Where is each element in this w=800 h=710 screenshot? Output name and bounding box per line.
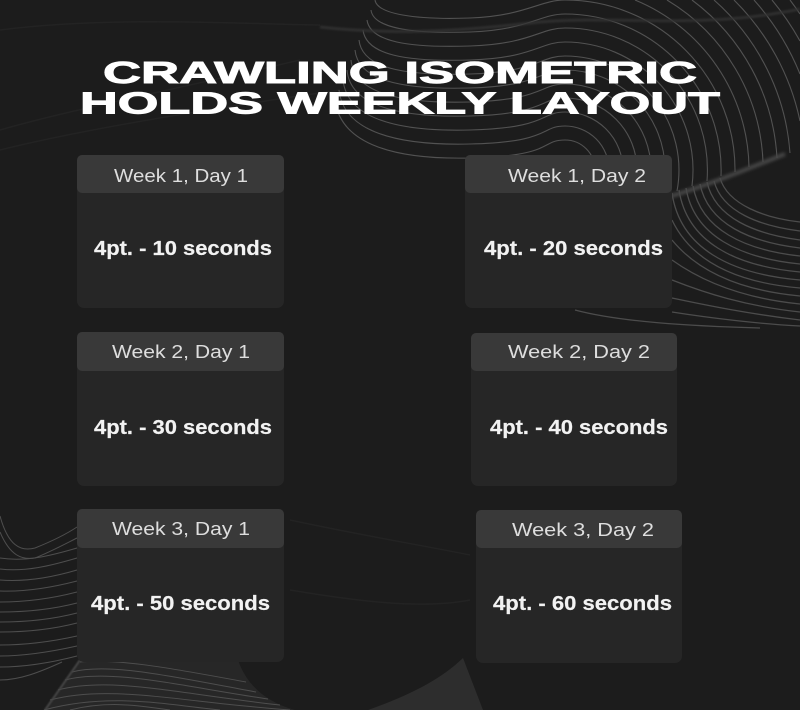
title: HOLDS WEEKLY LAYOUT [80, 86, 720, 120]
background wave: bottom centre peak [368, 658, 483, 710]
panel: week 1 day 2 [465, 155, 672, 308]
panel: week 3 day 1 [77, 509, 284, 662]
panel: week 3 day 2: 4pt. - 60 seconds [493, 593, 672, 615]
background wave lines: right side below ridge [575, 178, 800, 328]
background wave lines: top arcs [335, 0, 800, 191]
background wave lines: bottom left [0, 516, 77, 680]
panel: week 1 day 1 [77, 155, 284, 308]
panel: week 2 day 2: Week 2, Day 2 [508, 341, 650, 362]
panel: week 2 day 2 [471, 333, 677, 486]
panel: week 3 day 1: Week 3, Day 1 [112, 518, 250, 539]
panel: week 3 day 1: 4pt. - 50 seconds [91, 593, 270, 615]
panel: week 1 day 1: 4pt. - 10 seconds [94, 238, 272, 260]
panel: week 1 day 2: 4pt. - 20 seconds [484, 238, 663, 260]
panel: week 2 day 1 [77, 332, 284, 486]
panel: week 2 day 1: 4pt. - 30 seconds [94, 417, 272, 439]
panel: week 2 day 1: Week 2, Day 1 [112, 341, 250, 362]
background wave: faint top band [320, 9, 800, 31]
background wave lines: fan under week 3 day 1 [44, 660, 295, 710]
title: CRAWLING ISOMETRIC [103, 55, 697, 90]
background texture: faint strokes [0, 22, 470, 604]
panel: week 2 day 2: 4pt. - 40 seconds [490, 417, 668, 439]
panel: week 1 day 2: Week 1, Day 2 [508, 165, 646, 186]
background wave ridge [668, 154, 785, 197]
panel: week 1 day 1: Week 1, Day 1 [114, 165, 248, 186]
title [80, 55, 720, 120]
panel: week 3 day 2: Week 3, Day 2 [512, 519, 654, 540]
panel: week 3 day 2 [476, 510, 682, 663]
